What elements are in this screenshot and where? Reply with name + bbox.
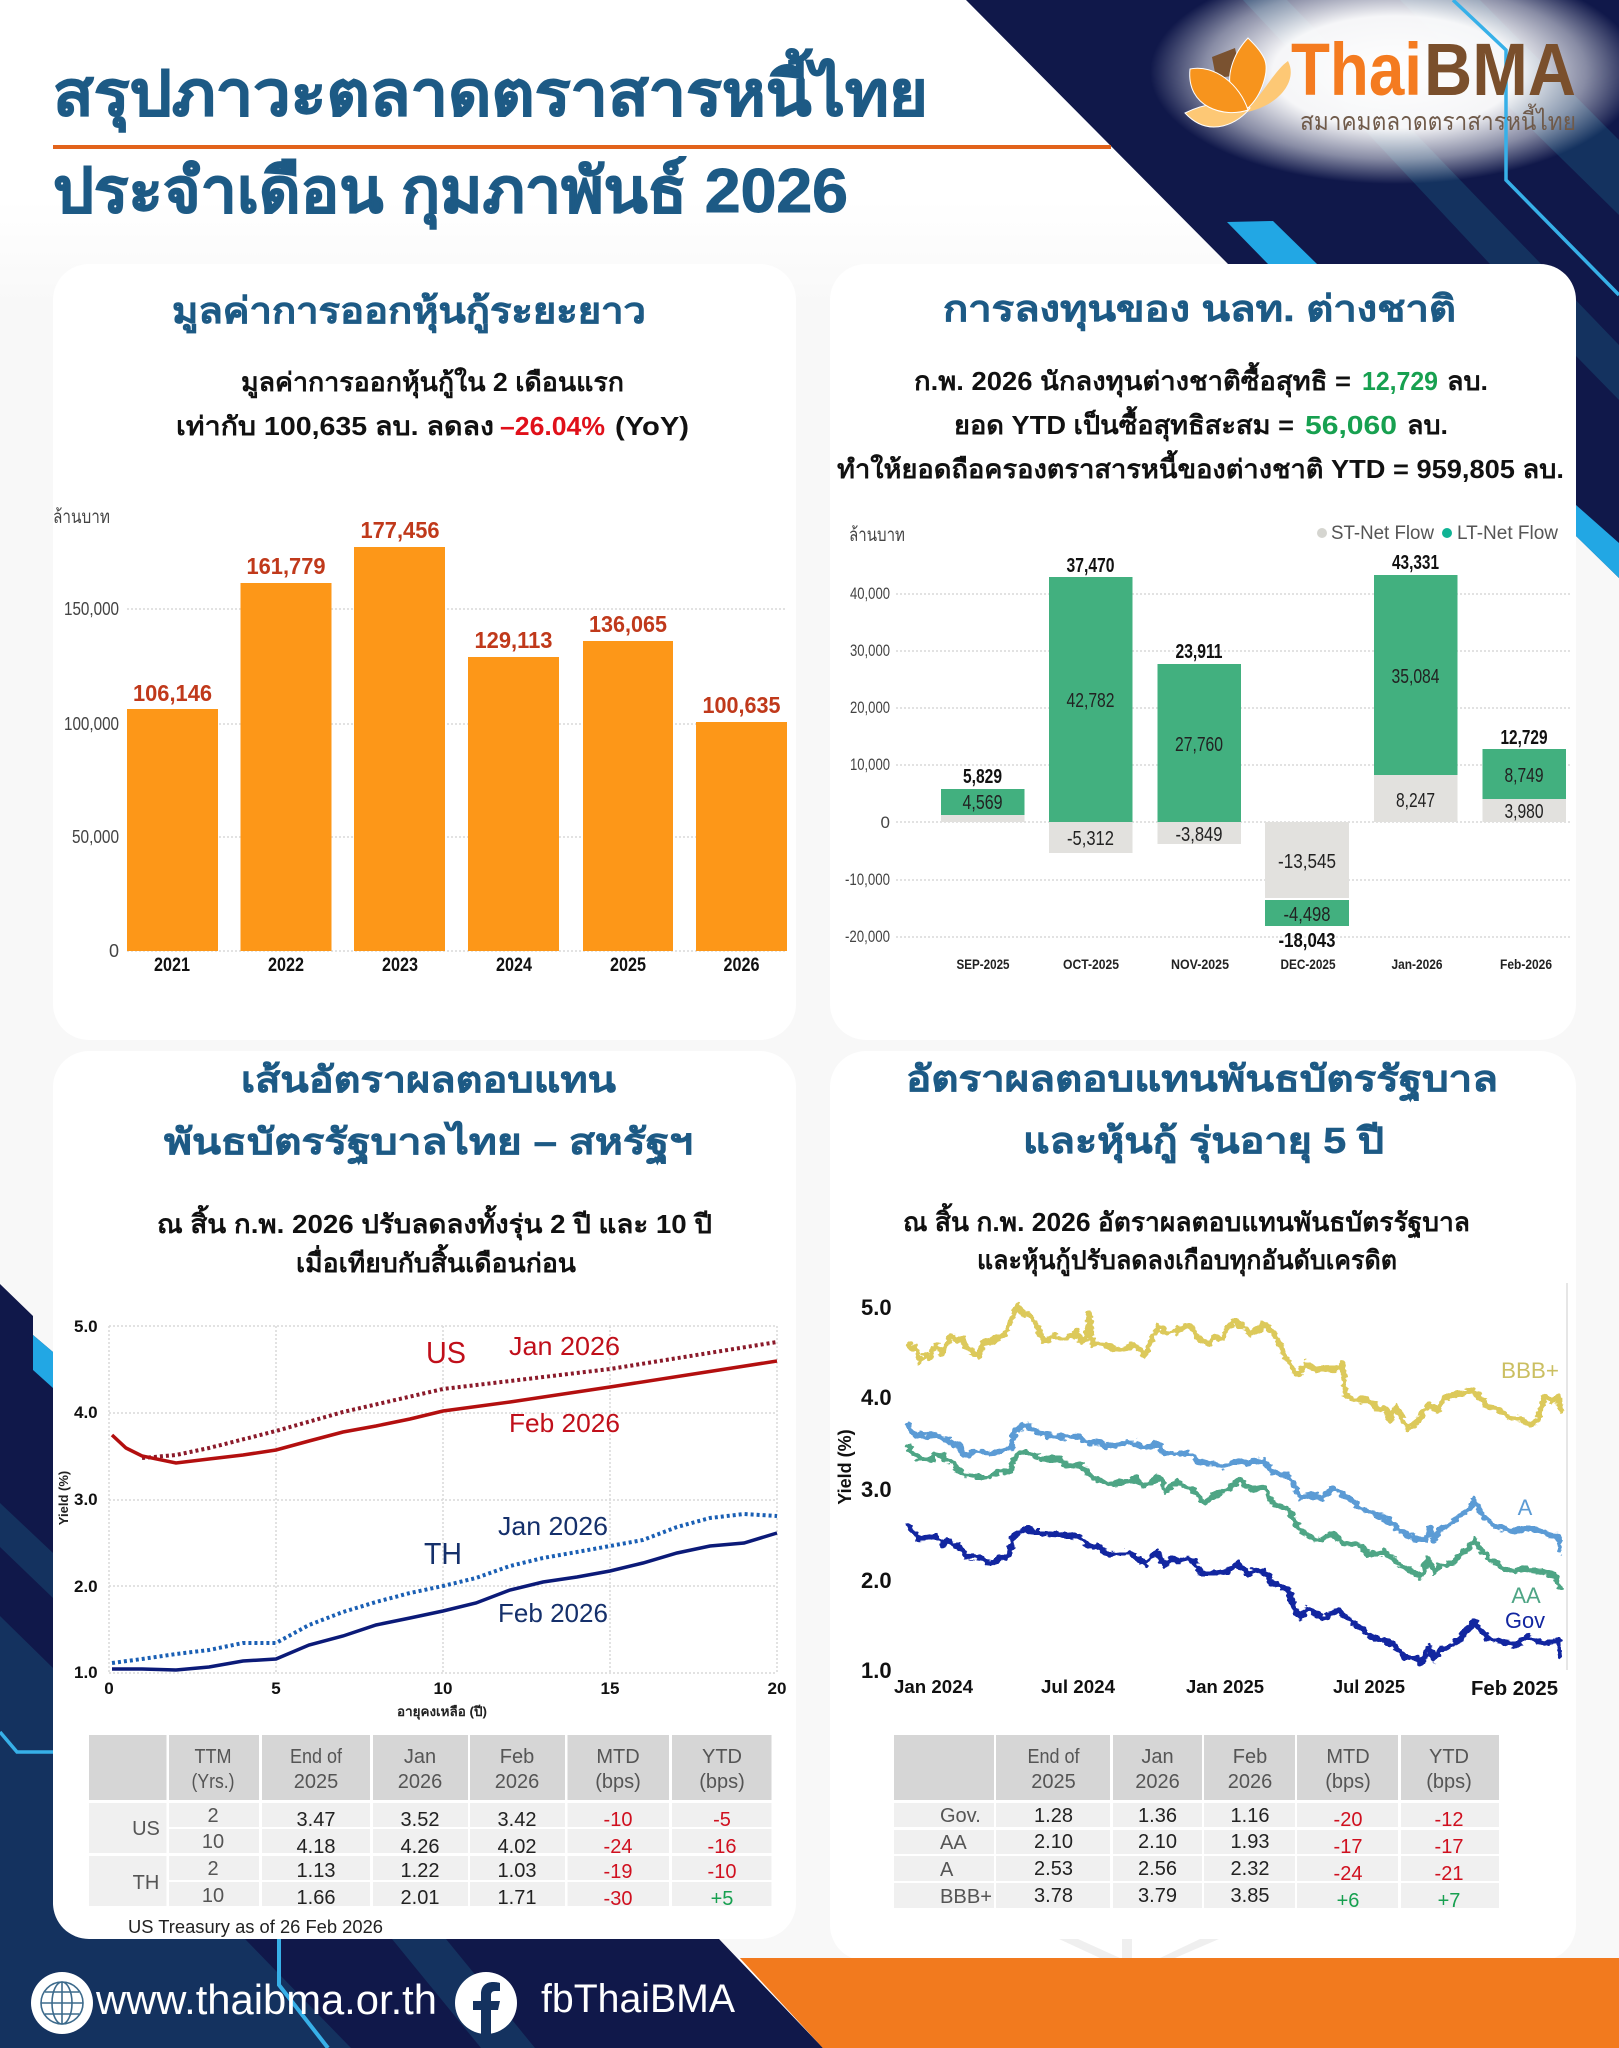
table: yields US and TH: 3.42 xyxy=(498,1809,536,1831)
table: yields by rating: End of xyxy=(1028,1746,1080,1768)
table: yields US and TH: -19 xyxy=(604,1861,632,1883)
text: issuance summary: มูลค่าการออกหุ้นกู้ใน 2 เดือนแรก xyxy=(241,367,624,399)
stacked bar chart: net flows: NOV-2025 xyxy=(1171,956,1229,972)
legend: LT-Net Flow xyxy=(1457,523,1558,544)
legend: ST-Net Flow xyxy=(1331,523,1434,544)
stacked bar chart: net flows: Feb-2026 xyxy=(1500,956,1552,972)
table: yields US and TH: 1.71 xyxy=(498,1887,536,1909)
title: สรุปภาวะตลาดตราสารหนี้ไทย xyxy=(53,48,928,132)
table: yields by rating: -24 xyxy=(1334,1863,1362,1885)
logo: ThaiBMA: BMA xyxy=(1424,28,1576,111)
table: yields US and TH: (bps) xyxy=(595,1771,641,1793)
table: yields US and TH: -30 xyxy=(604,1888,632,1910)
stacked bar chart: net flows: 42,782 xyxy=(1066,690,1114,712)
title: ประจำเดือน กุมภาพันธ์ 2026 xyxy=(53,156,848,229)
stacked bar chart: net flows: 0 xyxy=(881,813,890,832)
heading: yield curve: พันธบัตรรัฐบาลไทย – สหรัฐฯ xyxy=(164,1120,693,1165)
line chart: TH and US yield curves: TH xyxy=(424,1536,462,1571)
stacked bar chart: net flows: -10,000 xyxy=(845,870,890,889)
stacked bar chart: net flows: 30,000 xyxy=(850,641,890,660)
panel: government and corporate yields xyxy=(830,1051,1576,1961)
table: yields US and TH: 2025 xyxy=(294,1771,338,1793)
stacked bar chart: net flows: 8,247 xyxy=(1396,790,1435,812)
website: www.thaibma.or.th xyxy=(95,1976,437,2023)
heading: yield curve: เส้นอัตราผลตอบแทน xyxy=(241,1059,616,1100)
text: foreign flow summary: ทำให้ยอดถือครองตราสารหนี้ของต่างชาติ YTD = 959,805 ลบ. xyxy=(837,449,1564,484)
table: yields by rating: (bps) xyxy=(1426,1771,1472,1793)
table: yields by rating: Feb xyxy=(1233,1746,1267,1768)
table: yields by rating: A xyxy=(940,1859,954,1881)
stacked bar chart: net flows: 10,000 xyxy=(850,755,890,774)
bar chart: issuance by year: 2023 xyxy=(382,955,418,976)
line chart: 5-year yields by rating: 3.0 xyxy=(861,1477,892,1502)
table: yields US and TH: 1.03 xyxy=(498,1860,536,1882)
stacked bar chart: net flows: ล้านบาท xyxy=(849,525,905,546)
stacked bar chart: net flows: -20,000 xyxy=(845,927,890,946)
text: yield curve summary xyxy=(157,1204,712,1278)
stacked bar chart: net flows: -5,312 xyxy=(1067,828,1114,850)
stacked bar chart: net flows: 40,000 xyxy=(850,584,890,603)
line chart: 5-year yields by rating: Jul 2025 xyxy=(1333,1677,1405,1697)
stacked bar chart: net flows: DEC-2025 xyxy=(1280,956,1336,972)
stacked bar chart: net flows: 35,084 xyxy=(1392,666,1440,688)
panel: foreign investors xyxy=(830,264,1576,1040)
line chart: TH and US yield curves: US xyxy=(426,1335,466,1370)
heading: yield curve xyxy=(164,1059,693,1165)
table: yields by rating: (bps) xyxy=(1325,1771,1371,1793)
text: foreign flow summary: 12,729 xyxy=(1362,366,1438,396)
stacked bar chart: net flows: -3,849 xyxy=(1176,824,1222,846)
bar chart: issuance by year: 161,779 xyxy=(246,553,326,579)
table: yields by rating: 2.10 xyxy=(1034,1831,1073,1853)
heading: foreign investment: การลงทุนของ นลท. ต่างชาติ xyxy=(943,288,1456,332)
logo: ThaiBMA xyxy=(1185,28,1576,136)
line chart: TH and US yield curves: Feb 2026 xyxy=(498,1598,608,1628)
text: yield curve summary: เมื่อเทียบกับสิ้นเดือนก่อน xyxy=(296,1243,576,1278)
footnote: US Treasury as of 26 Feb 2026 xyxy=(128,1917,383,1937)
bar chart: issuance by year: 0 xyxy=(109,941,119,961)
line chart: 5-year yields by rating: Gov xyxy=(1505,1608,1545,1633)
line chart: 5-year yields by rating: 5.0 xyxy=(861,1295,892,1320)
bar chart: issuance by year: 100,000 xyxy=(64,714,119,734)
table: yields by rating: -12 xyxy=(1435,1809,1463,1831)
bar chart: issuance by year: 2025 xyxy=(610,955,646,976)
table: yields US and TH: (Yrs.) xyxy=(192,1771,234,1793)
table: yields by rating: 2.32 xyxy=(1231,1858,1269,1880)
table: yields by rating: -21 xyxy=(1435,1863,1463,1885)
logo: ThaiBMA: Thai xyxy=(1291,28,1422,111)
line chart: TH and US yield curves: 5 xyxy=(271,1679,281,1698)
table: yields by rating: -17 xyxy=(1334,1836,1362,1858)
table: yields by rating: +7 xyxy=(1438,1890,1460,1912)
stacked bar chart: net flows xyxy=(845,523,1570,972)
stacked bar chart: net flows: Jan-2026 xyxy=(1392,956,1443,972)
stacked bar chart: net flows: 8,749 xyxy=(1504,765,1544,787)
line chart: 5-year yields by rating: BBB+ xyxy=(1501,1358,1559,1383)
table: yields by rating: 3.85 xyxy=(1231,1885,1269,1907)
table: yields US and TH: 4.26 xyxy=(401,1836,439,1858)
heading: issuance: มูลค่าการออกหุ้นกู้ระยะยาว xyxy=(172,290,646,334)
line chart: TH and US yield curves: 0 xyxy=(104,1679,114,1698)
panel: long-term debenture issuance xyxy=(53,264,796,1040)
line chart: TH and US yield curves: Jan 2026 xyxy=(509,1331,620,1361)
line chart: TH and US yield curves: 1.0 xyxy=(74,1663,98,1682)
text: foreign flow summary: 56,060 xyxy=(1305,410,1397,440)
table: yields US and TH: 1.66 xyxy=(297,1887,335,1909)
facebook page: fbThaiBMA xyxy=(541,1977,735,2021)
text: foreign flow summary: ก.พ. 2026 นักลงทุนต่างชาติซื้อสุทธิ = xyxy=(914,361,1351,398)
icon: globe xyxy=(31,1972,93,2034)
footer xyxy=(31,1939,1619,2048)
table: yields US and TH: (bps) xyxy=(699,1771,745,1793)
stacked bar chart: net flows: 37,470 xyxy=(1066,555,1114,577)
heading: 5-year yields: และหุ้นกู้ รุ่นอายุ 5 ปี xyxy=(1023,1120,1384,1164)
bar chart: issuance by year: 2022 xyxy=(268,955,304,976)
table: yields US and TH: 10 xyxy=(202,1885,224,1907)
table: yields US and TH: YTD xyxy=(702,1746,742,1768)
line chart: 5-year yields by rating: Feb 2025 xyxy=(1471,1678,1558,1700)
stacked bar chart: net flows: -18,043 xyxy=(1278,930,1336,952)
table: yields US and TH: 3.47 xyxy=(297,1809,335,1831)
table: yields by rating: +6 xyxy=(1337,1890,1359,1912)
line chart: TH and US yield curves: Yield (%) xyxy=(56,1471,71,1525)
table: yields US and TH xyxy=(89,1735,772,1910)
text: 5-year yields summary xyxy=(903,1202,1470,1277)
line chart: 5-year yields by rating: A xyxy=(1518,1495,1533,1520)
bar chart: issuance by year: 100,635 xyxy=(702,692,781,718)
text: issuance summary: (YoY) xyxy=(615,411,689,441)
line chart: TH and US yield curves: Jan 2026 xyxy=(498,1511,608,1541)
stacked bar chart: net flows: 43,331 xyxy=(1392,552,1439,574)
table: yields US and TH: Jan xyxy=(404,1746,436,1768)
line chart: TH and US yield curves: 20 xyxy=(768,1679,786,1698)
text: foreign flow summary: ลบ. xyxy=(1407,410,1448,440)
table: yields US and TH: MTD xyxy=(596,1746,640,1768)
table: yields by rating: 1.28 xyxy=(1034,1805,1073,1827)
stacked bar chart: net flows: 27,760 xyxy=(1175,734,1223,756)
line chart: TH and US yield curves: 5.0 xyxy=(74,1317,98,1336)
table: yields US and TH: 2026 xyxy=(398,1771,442,1793)
bar chart: issuance by year: ล้านบาท xyxy=(53,507,110,528)
table: yields US and TH: 2 xyxy=(207,1858,219,1880)
table: yields US and TH: -16 xyxy=(708,1836,736,1858)
bar chart: issuance by year: 136,065 xyxy=(589,611,667,637)
table: yields by rating: -20 xyxy=(1334,1809,1362,1831)
bar chart: issuance by year xyxy=(53,507,787,976)
icon: facebook xyxy=(455,1972,517,2034)
table: yields by rating: AA xyxy=(940,1832,967,1854)
table: yields by rating: -17 xyxy=(1435,1836,1463,1858)
bar chart: issuance by year: 2021 xyxy=(154,955,190,976)
table: yields US and TH: 3.52 xyxy=(401,1809,439,1831)
table: yields US and TH: 1.13 xyxy=(297,1860,335,1882)
table: yields US and TH: -24 xyxy=(604,1836,632,1858)
line chart: 5-year yields by rating: 2.0 xyxy=(861,1568,892,1593)
text: foreign flow summary: ยอด YTD เป็นซื้อสุทธิสะสม = xyxy=(954,405,1294,442)
line chart: 5-year yields by rating: Jul 2024 xyxy=(1041,1677,1115,1697)
table: yields US and TH: 10 xyxy=(202,1831,224,1853)
table: yields US and TH: TH xyxy=(133,1872,159,1894)
stacked bar chart: net flows: -13,545 xyxy=(1278,851,1336,873)
table: yields US and TH: 2 xyxy=(207,1805,219,1827)
table: yields US and TH: 4.18 xyxy=(297,1836,335,1858)
line chart: TH and US yield curves xyxy=(56,1317,786,1720)
text: issuance summary: –26.04% xyxy=(500,411,605,441)
table: yields US and TH: -10 xyxy=(604,1809,632,1831)
table: yields by rating: 2.56 xyxy=(1138,1858,1177,1880)
table: yields by rating: Gov. xyxy=(940,1805,981,1827)
stacked bar chart: net flows: 3,980 xyxy=(1504,801,1544,823)
text: yield curve summary: ณ สิ้น ก.พ. 2026 ปรับลดลงทั้งรุ่น 2 ปี และ 10 ปี xyxy=(157,1204,712,1241)
table: yields US and TH: 2026 xyxy=(495,1771,539,1793)
line chart: TH and US yield curves: 15 xyxy=(601,1679,619,1698)
table: yields by rating: 1.36 xyxy=(1138,1805,1177,1827)
table: yields by rating: 3.78 xyxy=(1034,1885,1073,1907)
table: yields by rating: MTD xyxy=(1326,1746,1370,1768)
text: foreign flow summary: ลบ. xyxy=(1447,366,1488,396)
line chart: 5-year yields by rating: Yield (%) xyxy=(835,1429,855,1505)
table: yields by rating: YTD xyxy=(1429,1746,1469,1768)
table: yields by rating: 2026 xyxy=(1228,1771,1272,1793)
table: yields by rating: 2026 xyxy=(1135,1771,1180,1793)
line chart: TH and US yield curves: 10 xyxy=(434,1679,452,1698)
table: yields by rating xyxy=(894,1735,1499,1912)
line chart: TH and US yield curves: Feb 2026 xyxy=(509,1408,620,1438)
heading: 5-year yields xyxy=(906,1058,1498,1164)
text: foreign flow summary xyxy=(837,361,1564,484)
table: yields US and TH: -10 xyxy=(708,1861,736,1883)
table: yields US and TH: 1.22 xyxy=(401,1860,439,1882)
stacked bar chart: net flows: -4,498 xyxy=(1284,904,1330,926)
bar chart: issuance by year: 129,113 xyxy=(474,627,552,653)
table: yields by rating: 3.79 xyxy=(1138,1885,1177,1907)
bar chart: issuance by year: 50,000 xyxy=(72,827,119,847)
table: yields US and TH: Feb xyxy=(500,1746,534,1768)
text: issuance summary xyxy=(176,367,689,441)
stacked bar chart: net flows: 12,729 xyxy=(1500,727,1548,749)
line chart: TH and US yield curves: 2.0 xyxy=(74,1577,98,1596)
panel: yield curves xyxy=(53,1051,796,1939)
logo: ThaiBMA: สมาคมตลาดตราสารหนี้ไทย xyxy=(1300,103,1576,136)
table: yields by rating: 1.16 xyxy=(1231,1805,1269,1827)
table: yields by rating: 2.53 xyxy=(1034,1858,1073,1880)
bar chart: issuance by year: 2024 xyxy=(496,955,532,976)
bar chart: issuance by year: 150,000 xyxy=(64,599,119,619)
table: yields by rating: 2.10 xyxy=(1138,1831,1177,1853)
table: yields US and TH: +5 xyxy=(711,1888,733,1910)
table: yields US and TH: 2.01 xyxy=(401,1887,439,1909)
line chart: 5-year yields by rating: 4.0 xyxy=(861,1385,892,1410)
table: yields US and TH: TTM xyxy=(194,1746,232,1768)
table: yields US and TH: -5 xyxy=(713,1809,731,1831)
text: 5-year yields summary: ณ สิ้น ก.พ. 2026 อัตราผลตอบแทนพันธบัตรรัฐบาล xyxy=(903,1202,1470,1240)
legend xyxy=(1317,523,1558,544)
bar chart: issuance by year: 177,456 xyxy=(360,517,440,543)
line chart: 5-year yields by rating: AA xyxy=(1511,1583,1541,1608)
table: yields by rating: 2025 xyxy=(1031,1771,1076,1793)
line chart: 5-year yields by rating xyxy=(835,1283,1567,1700)
heading: 5-year yields: อัตราผลตอบแทนพันธบัตรรัฐบาล xyxy=(906,1058,1498,1102)
stacked bar chart: net flows: 23,911 xyxy=(1176,641,1222,663)
stacked bar chart: net flows: 5,829 xyxy=(963,766,1002,788)
table: yields by rating: 1.93 xyxy=(1231,1831,1269,1853)
stacked bar chart: net flows: OCT-2025 xyxy=(1063,956,1119,972)
table: yields by rating: Jan xyxy=(1141,1746,1174,1768)
text: issuance summary: เท่ากับ 100,635 ลบ. ลดลง xyxy=(176,411,494,441)
text: 5-year yields summary: และหุ้นกู้ปรับลดลงเกือบทุกอันดับเครดิต xyxy=(977,1245,1397,1277)
table: yields US and TH: 4.02 xyxy=(498,1836,536,1858)
stacked bar chart: net flows: 20,000 xyxy=(850,698,890,717)
line chart: 5-year yields by rating: Jan 2024 xyxy=(894,1677,973,1697)
line chart: TH and US yield curves: อายุคงเหลือ (ปี) xyxy=(397,1704,487,1720)
title xyxy=(53,48,1111,229)
stacked bar chart: net flows: SEP-2025 xyxy=(956,956,1010,972)
table: yields US and TH: US xyxy=(132,1818,160,1840)
stacked bar chart: net flows: 4,569 xyxy=(962,792,1002,814)
table: yields US and TH: End of xyxy=(290,1746,342,1768)
line chart: TH and US yield curves: 4.0 xyxy=(74,1403,98,1422)
bar chart: issuance by year: 2026 xyxy=(724,955,760,976)
bar chart: issuance by year: 106,146 xyxy=(133,680,212,706)
line chart: TH and US yield curves: 3.0 xyxy=(74,1490,98,1509)
table: yields by rating: BBB+ xyxy=(940,1886,992,1908)
line chart: 5-year yields by rating: 1.0 xyxy=(861,1658,892,1683)
line chart: 5-year yields by rating: Jan 2025 xyxy=(1186,1677,1264,1697)
